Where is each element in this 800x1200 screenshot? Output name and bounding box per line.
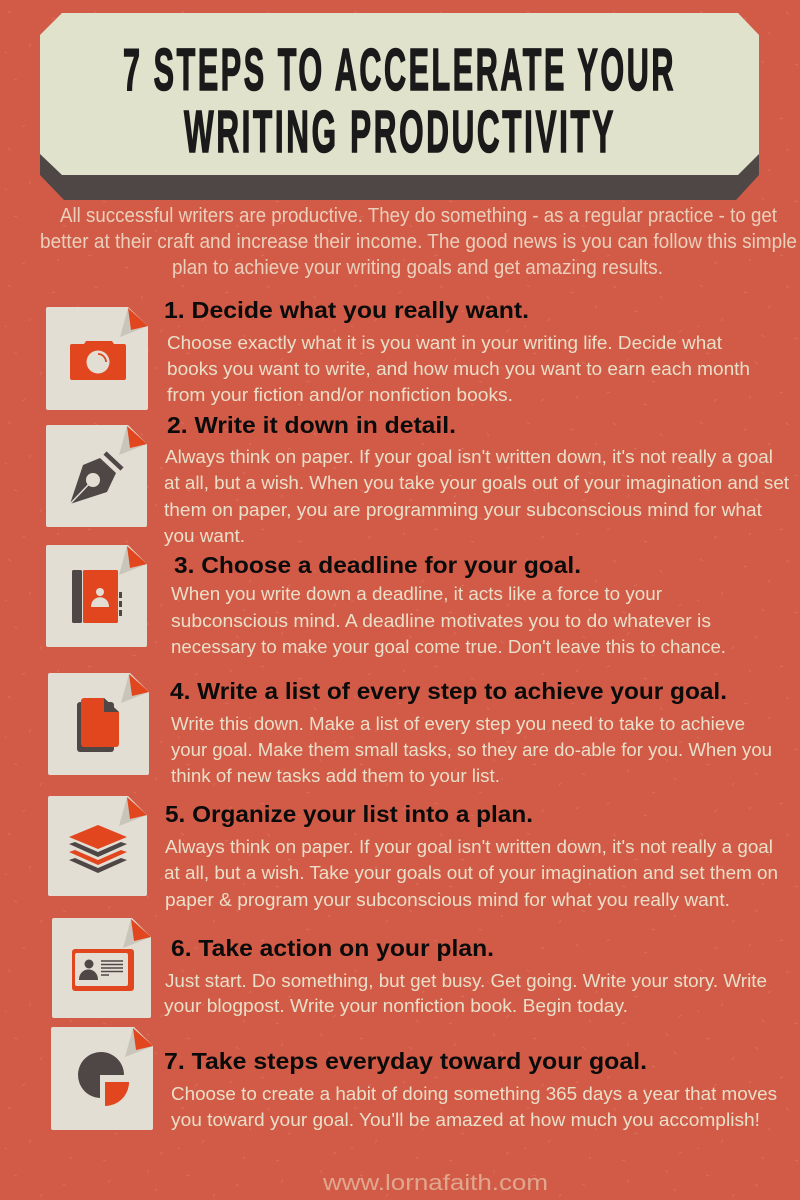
intro paragraph: plan to achieve your writing goals and get amazing results. (172, 256, 663, 279)
step 3 (46, 545, 726, 657)
icon: camera card (46, 307, 148, 410)
icon: id card (52, 918, 151, 1018)
body (171, 1084, 777, 1130)
body (171, 584, 726, 657)
body (164, 971, 767, 1016)
heading: 3. Choose a deadline for your goal. (174, 552, 581, 578)
heading: 4. Write a list of every step to achieve your goal. (170, 678, 727, 704)
body: your blogpost. Write your nonfiction book. Begin today. (164, 996, 628, 1016)
icon: address book card (46, 545, 147, 647)
icon: pie chart card (51, 1027, 153, 1130)
step 4 (48, 673, 772, 786)
body: Always think on paper. If your goal isn't written down, it's not really a goal (165, 837, 773, 857)
body (164, 447, 789, 546)
body: necessary to make your goal come true. Don't leave this to chance. (171, 637, 726, 657)
body: from your fiction and/or nonfiction books. (167, 385, 513, 405)
heading: 7. Take steps everyday toward your goal. (164, 1048, 647, 1074)
body: think of new tasks add them to your list. (171, 766, 500, 786)
body: you want. (164, 526, 245, 546)
body (171, 714, 772, 786)
body: you toward your goal. You'll be amazed at how much you accomplish! (171, 1110, 760, 1130)
icon: fountain pen card (46, 425, 147, 527)
title text (123, 37, 676, 165)
body: at all, but a wish. Take your goals out of your imagination and set them on (164, 863, 778, 883)
body: Choose to create a habit of doing something 365 days a year that moves (171, 1084, 777, 1104)
step 5 (48, 796, 778, 910)
body: Just start. Do something, but get busy. Get going. Write your story. Write (165, 971, 767, 991)
body: your goal. Make them small tasks, so they are do-able for you. When you (171, 740, 772, 760)
body: books you want to write, and how much you want to earn each month (167, 359, 750, 379)
step 2 (46, 412, 789, 546)
body (164, 837, 778, 910)
body (167, 333, 750, 405)
heading: 2. Write it down in detail. (167, 412, 456, 438)
body: When you write down a deadline, it acts like a force to your (171, 584, 662, 604)
body: Write this down. Make a list of every step you need to take to achieve (171, 714, 745, 734)
step 7 (51, 1027, 777, 1130)
step 1 (46, 297, 750, 410)
icon: documents card (48, 673, 149, 775)
body: subconscious mind. A deadline motivates you to do whatever is (171, 611, 711, 631)
body: Choose exactly what it is you want in your writing life. Decide what (167, 333, 722, 353)
icon: layers card (48, 796, 147, 896)
title banner (40, 13, 759, 200)
heading: 1. Decide what you really want. (164, 297, 529, 323)
body: at all, but a wish. When you take your goals out of your imagination and set (164, 473, 789, 493)
heading: 6. Take action on your plan. (171, 935, 494, 961)
body: them on paper, you are programming your subconscious mind for what (164, 500, 762, 520)
body: paper & program your subconscious mind for what you really want. (165, 890, 730, 910)
intro paragraph (40, 204, 797, 279)
heading: 5. Organize your list into a plan. (165, 801, 533, 827)
body: Always think on paper. If your goal isn't written down, it's not really a goal (165, 447, 773, 467)
footer url: www.lornafaith.com (322, 1170, 548, 1195)
step 6 (52, 918, 767, 1018)
